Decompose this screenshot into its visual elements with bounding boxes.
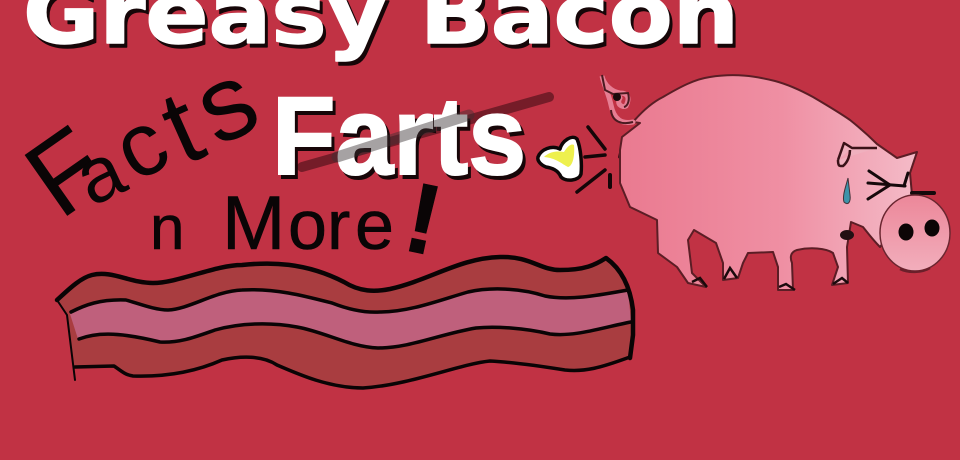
pig: snout (880, 195, 950, 271)
pig: closed eye (868, 171, 934, 199)
pig: ear (838, 143, 877, 166)
pig: nostrils (898, 220, 940, 240)
handwritten words: n More!: o (288, 186, 327, 264)
pig: tail (602, 76, 633, 122)
handwritten word: Facts: a (61, 124, 138, 222)
crossed-out word: Farts: Farts (272, 75, 526, 198)
handwritten words: n More!: e (355, 186, 394, 264)
cloud: puff (538, 137, 581, 180)
cloud: yellow blotch (544, 144, 574, 167)
fart action lines (577, 127, 622, 192)
handwritten words: n More!: M (222, 181, 285, 266)
fart cloud (538, 137, 581, 180)
bacon: pink fat band (70, 289, 631, 348)
handwritten words: n More!: n (150, 194, 184, 263)
handwritten word: Facts: s (177, 39, 275, 168)
pig: hooves (692, 268, 848, 290)
handwritten words: n More!: ! (395, 161, 451, 277)
handwritten word: Facts: c (97, 91, 184, 201)
pig: snout shadow (900, 268, 930, 272)
pig: body and legs (620, 75, 917, 290)
handwritten words: n More!: r (327, 186, 350, 264)
pig: tail dot (613, 93, 621, 101)
pig: tail outline (602, 75, 633, 123)
pig: chin mark (840, 230, 854, 240)
bacon strip (57, 257, 633, 388)
strike-through overlay across Farts (337, 115, 469, 157)
bacon: black outlines (57, 257, 633, 388)
handwritten word: Facts: F (4, 103, 127, 240)
pig (602, 75, 950, 290)
strike-through line behind Farts (302, 97, 549, 167)
pig: tear (843, 178, 850, 204)
handwritten word: Facts: t (145, 68, 219, 187)
crossed-out word: Farts: Farts (275, 79, 529, 202)
bacon: outer meat (57, 257, 633, 388)
